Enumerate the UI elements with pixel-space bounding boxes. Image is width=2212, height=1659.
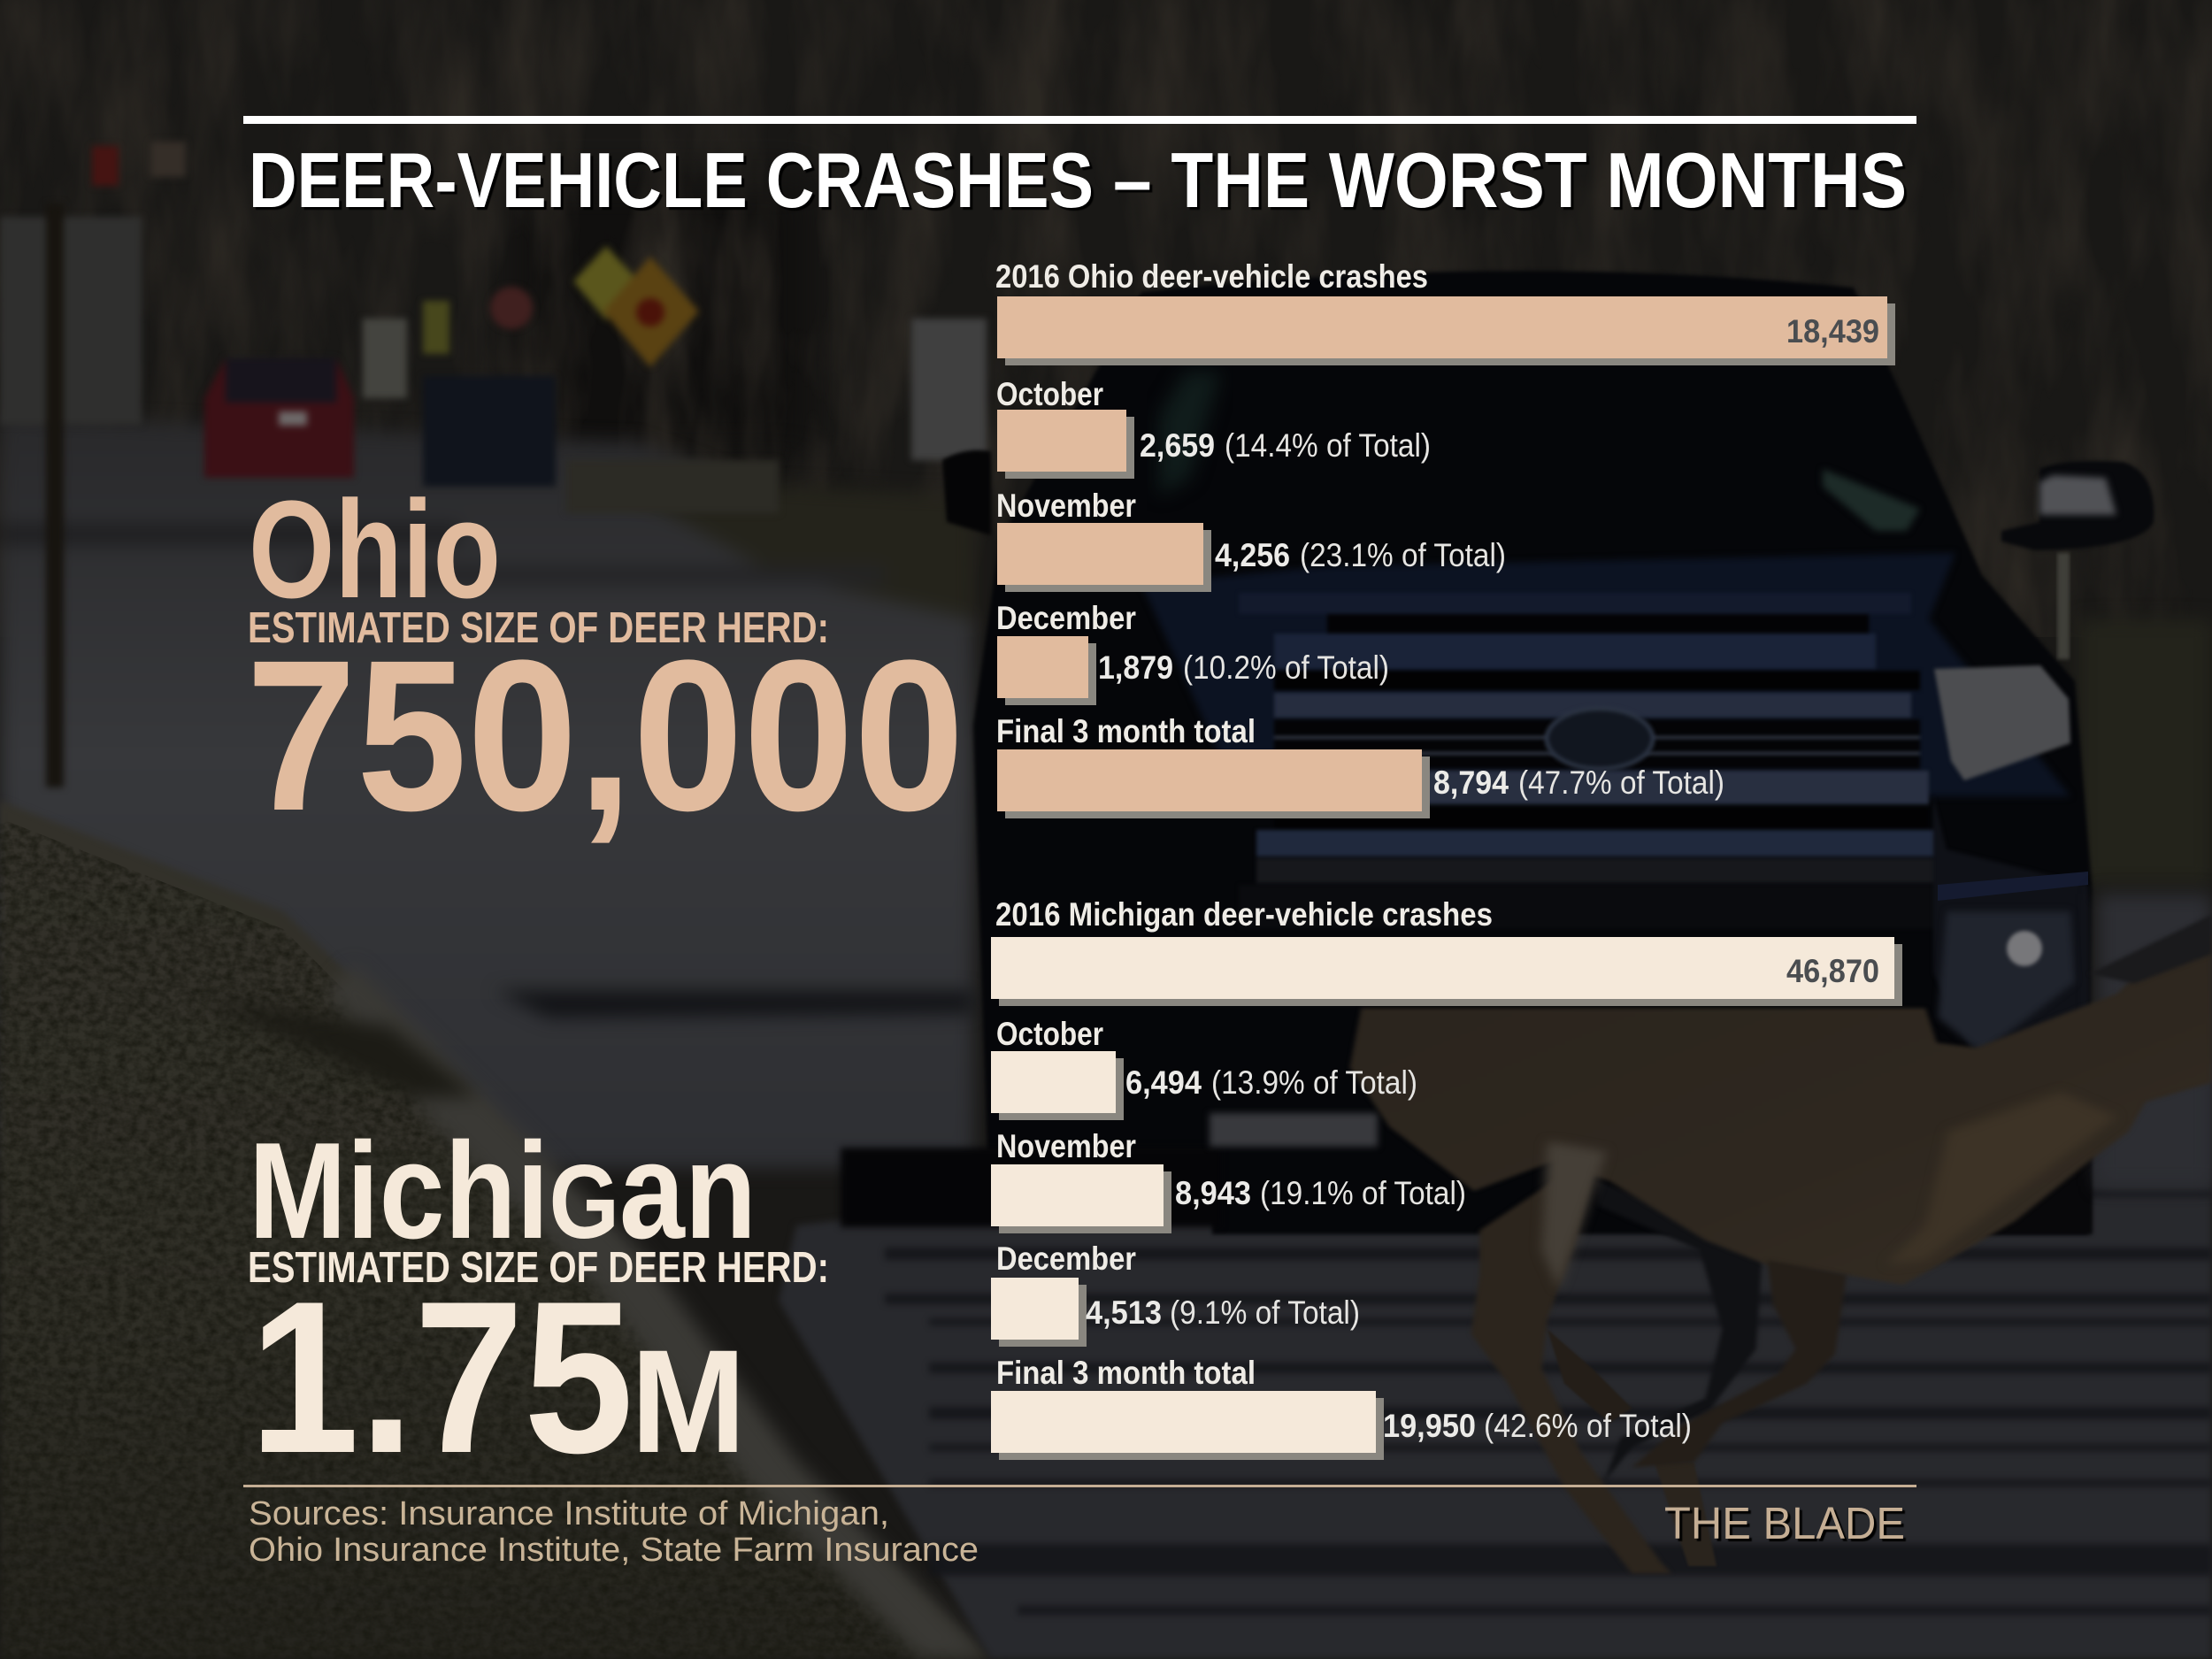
herd label: ESTIMATED SIZE OF DEER HERD: bbox=[248, 604, 829, 652]
value: November bbox=[1215, 537, 1506, 573]
bar: final 3 month total bbox=[997, 749, 1430, 818]
deer leg patch bbox=[1541, 1141, 1607, 1290]
top rule bbox=[243, 116, 1916, 124]
front corner bbox=[1933, 796, 2088, 1053]
sources bbox=[249, 1495, 979, 1569]
bar: October bbox=[991, 1051, 1124, 1120]
sources: Sources: Insurance Institute of Michigan, bbox=[249, 1495, 889, 1532]
value: December: 1,879 bbox=[1098, 649, 1173, 686]
value: December bbox=[1086, 1294, 1360, 1331]
value: December bbox=[1098, 649, 1389, 686]
deer muzzle bbox=[2089, 914, 2212, 984]
label: Ohio total: 2016 Ohio deer-vehicle crashes bbox=[995, 258, 1428, 295]
deer rear dark leg bbox=[1598, 1181, 1762, 1482]
deer lower leg bbox=[1655, 1463, 1717, 1566]
big number: 1.75M: M bbox=[631, 1320, 746, 1484]
road right of truck bbox=[2097, 894, 2212, 1186]
value: final 3 month total: 8,794 bbox=[1433, 764, 1509, 801]
headlight bbox=[1934, 665, 2070, 780]
mirror bbox=[2001, 461, 2154, 550]
value: October: (14.4% of Total) bbox=[1225, 427, 1431, 464]
wiper reflection bbox=[1823, 469, 1920, 531]
bar: November bbox=[991, 1164, 1171, 1233]
big number: 750,000: 750,000 bbox=[246, 616, 964, 856]
grille bbox=[1239, 593, 1938, 929]
value: final 3 month total: 19,950 bbox=[1383, 1408, 1476, 1444]
label: Michigan total: 2016 Michigan deer-vehicle crashes bbox=[995, 896, 1493, 933]
label: October: October bbox=[996, 1016, 1103, 1052]
bar: December bbox=[991, 1278, 1087, 1347]
label: final 3 month total: Final 3 month total bbox=[996, 713, 1256, 749]
credit: The Blade: THE BLADE bbox=[1664, 1498, 1905, 1548]
title: – THE WORST MONTHS bbox=[1113, 136, 1907, 224]
value: October bbox=[1125, 1064, 1417, 1101]
value: final 3 month total: (47.7% of Total) bbox=[1518, 764, 1724, 801]
label: November: November bbox=[996, 488, 1136, 524]
value: November: (23.1% of Total) bbox=[1300, 537, 1506, 573]
label: final 3 month total: Final 3 month total bbox=[996, 1355, 1256, 1391]
value: December: (9.1% of Total) bbox=[1170, 1294, 1360, 1331]
bar: October bbox=[997, 410, 1134, 479]
bar: November bbox=[997, 523, 1211, 592]
label: December: December bbox=[996, 1240, 1136, 1277]
panel: Michigan herd size bbox=[248, 1114, 829, 1498]
deer rear leg bbox=[1632, 1260, 1847, 1467]
label: October: October bbox=[996, 376, 1103, 412]
deer bbox=[1350, 914, 2212, 1573]
panel: Ohio herd size bbox=[246, 472, 964, 856]
road at bottom right bbox=[779, 1062, 2212, 1659]
hood bbox=[1141, 553, 2070, 796]
heading: Ohio: Ohio bbox=[249, 472, 501, 627]
value: October: 6,494 bbox=[1125, 1064, 1202, 1101]
panel: Michigan crash bars bbox=[991, 896, 1902, 1460]
heading: Michigan: MichiGan bbox=[249, 1114, 757, 1267]
herd label: ESTIMATED SIZE OF DEER HERD: bbox=[248, 1244, 829, 1292]
value: October: (13.9% of Total) bbox=[1211, 1064, 1417, 1101]
footer rule bbox=[243, 1485, 1916, 1487]
deer front leg bbox=[1471, 1151, 1671, 1573]
value: final 3 month total bbox=[1383, 1408, 1692, 1444]
big number: 1.75M: 1.75 bbox=[250, 1256, 634, 1498]
value: November: 8,943 bbox=[1175, 1175, 1251, 1211]
label: December: December bbox=[996, 600, 1136, 636]
value: December: (10.2% of Total) bbox=[1183, 649, 1389, 686]
grass verge bbox=[0, 801, 991, 1659]
title: DEER-VEHICLE CRASHES bbox=[249, 136, 1094, 224]
value: final 3 month total bbox=[1433, 764, 1724, 801]
value: October bbox=[1140, 427, 1431, 464]
bar: December bbox=[997, 636, 1096, 705]
value: November: (19.1% of Total) bbox=[1260, 1175, 1466, 1211]
bar: Michigan total bbox=[991, 937, 1902, 1006]
road tree shadows bbox=[885, 1190, 2212, 1615]
bar: Ohio total bbox=[997, 296, 1895, 365]
toyota emblem bbox=[1547, 709, 1653, 769]
far street bbox=[0, 416, 973, 1168]
value: December: 4,513 bbox=[1086, 1294, 1162, 1331]
value: November bbox=[1175, 1175, 1466, 1211]
value: November: 4,256 bbox=[1215, 537, 1290, 573]
deer chest shading bbox=[1886, 1092, 2117, 1265]
value: 18,439: 18,439 bbox=[1786, 313, 1879, 349]
bar: final 3 month total bbox=[991, 1391, 1384, 1460]
deer second front leg bbox=[1548, 1329, 1632, 1423]
truck bbox=[841, 271, 2154, 1234]
curb and grass shadow bbox=[204, 964, 991, 1659]
sources: Ohio Insurance Institute, State Farm Insurance bbox=[249, 1532, 979, 1569]
value: final 3 month total: (42.6% of Total) bbox=[1484, 1408, 1692, 1444]
deer body bbox=[1350, 934, 2212, 1285]
trees at top bbox=[0, 0, 2212, 885]
building, pole, signs and parked cars bbox=[0, 142, 987, 787]
value: 46,870: 46,870 bbox=[1786, 953, 1879, 989]
panel: Ohio crash bars bbox=[995, 258, 1895, 818]
value: October: 2,659 bbox=[1140, 427, 1215, 464]
label: November: November bbox=[996, 1128, 1136, 1164]
title bbox=[249, 136, 1907, 224]
